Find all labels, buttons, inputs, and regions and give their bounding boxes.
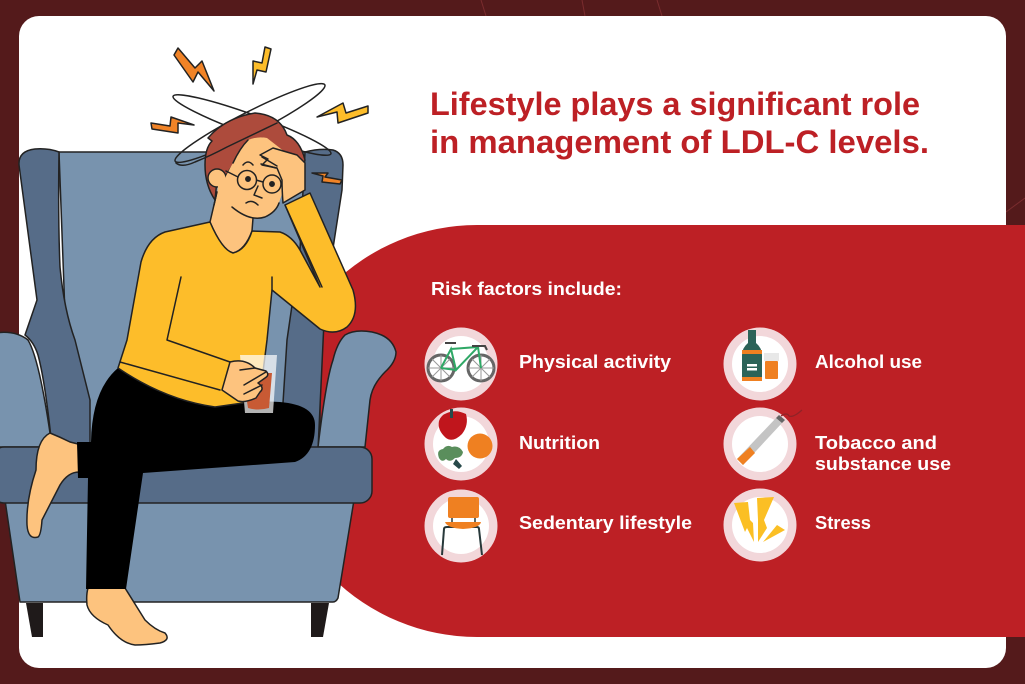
- illustration: stressed man in armchair: [0, 47, 396, 645]
- black trousers: [77, 368, 315, 589]
- face: [217, 137, 285, 218]
- icon: stress bolts: [724, 488, 796, 562]
- front foot: [87, 588, 167, 645]
- label: [815, 433, 951, 474]
- label: substance use: [815, 454, 951, 474]
- label: Stress: [815, 513, 871, 533]
- label: Tobacco and: [815, 433, 937, 453]
- finger lines: [240, 368, 266, 394]
- neck: [210, 192, 254, 253]
- dizzy rings, back: [170, 75, 334, 171]
- jaw line: [214, 140, 279, 218]
- glass: [240, 355, 277, 413]
- title: [430, 86, 929, 160]
- hand holding glass: [222, 361, 268, 402]
- hair: [205, 113, 305, 200]
- finger lines: [261, 157, 277, 168]
- sweater fold lines: [120, 205, 322, 390]
- icon: fruit and vegetables: [424, 408, 498, 480]
- icon: bicycle: [424, 328, 498, 400]
- red panel: [271, 225, 1025, 637]
- yellow sweater: [118, 193, 355, 407]
- drink: [246, 373, 272, 410]
- dizzy ring, front arc: [176, 123, 277, 165]
- title: in management of LDL-C levels.: [430, 124, 929, 160]
- label: Sedentary lifestyle: [519, 513, 692, 533]
- nose, mouth and eyebrow: [243, 162, 262, 205]
- rear foot: [27, 433, 79, 538]
- icon: cigarette: [724, 408, 802, 480]
- armchair: [0, 149, 396, 637]
- icon: chair: [424, 490, 498, 562]
- ear: [208, 169, 226, 187]
- hand on forehead: [260, 148, 305, 203]
- label: Nutrition: [519, 433, 600, 453]
- label: Physical activity: [519, 352, 671, 372]
- title: Lifestyle plays a significant role: [430, 86, 920, 122]
- icon: alcohol: [724, 328, 796, 400]
- stress bolts: [151, 47, 368, 184]
- glasses: [226, 170, 281, 193]
- label: Alcohol use: [815, 352, 922, 372]
- heading: risk factors: Risk factors include:: [431, 279, 622, 299]
